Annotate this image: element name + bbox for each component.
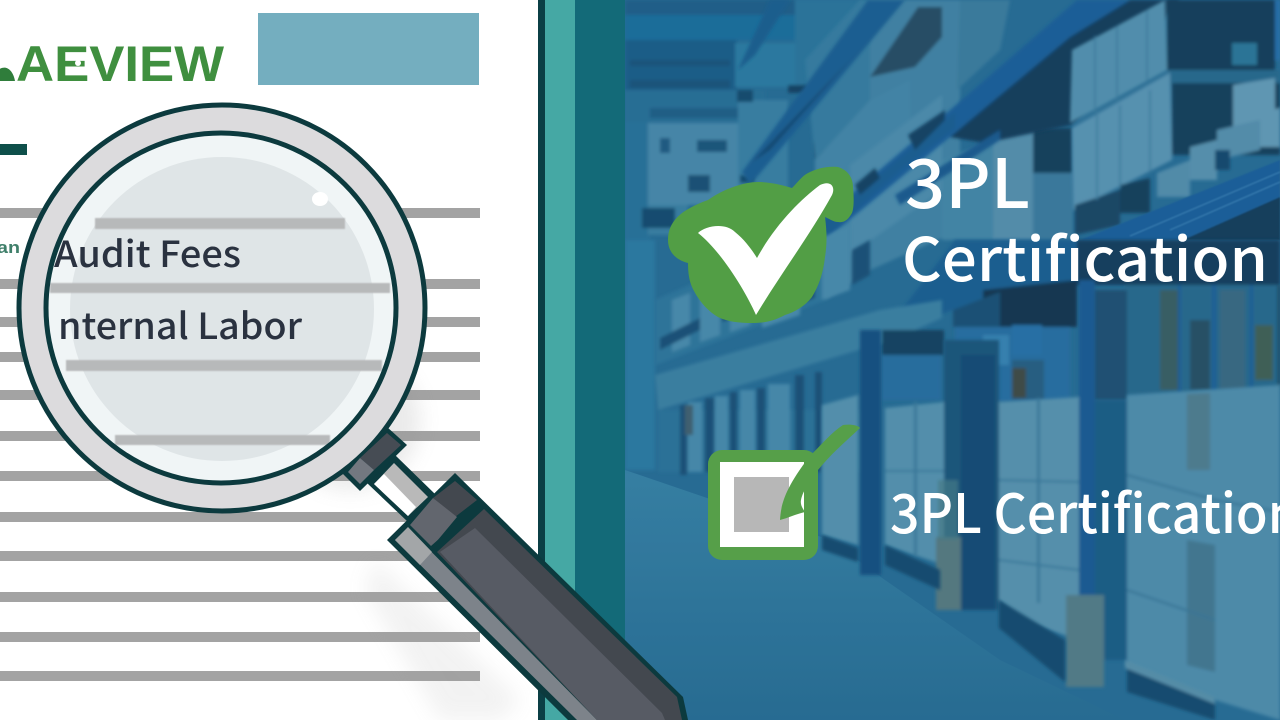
lens — [46, 133, 396, 483]
document header block — [258, 13, 479, 85]
label: 3PL Certification large: 3PL — [905, 129, 1030, 228]
warehouse floor — [625, 470, 935, 616]
boxes A — [822, 395, 858, 545]
label: 3PL Certification large — [902, 129, 1268, 299]
magnified text: Internal Labor: nternal Labor — [58, 298, 302, 350]
boxes C and D — [1127, 385, 1280, 720]
document text lines — [0, 208, 480, 681]
icon: green checkbox — [708, 425, 860, 560]
panel: review document — [0, 0, 538, 720]
lens magnified lines — [50, 218, 390, 445]
panel border and teal spine — [538, 0, 625, 720]
icon: magnifying glass — [19, 105, 688, 720]
lens frame — [19, 105, 425, 511]
warehouse middle shelf band — [882, 240, 1280, 402]
handle collar — [342, 427, 407, 491]
warehouse far end — [626, 0, 816, 469]
warehouse left rack — [655, 225, 944, 475]
lens shadow — [280, 350, 420, 490]
warehouse upper racks — [805, 0, 1073, 300]
icon: green check badge — [668, 167, 854, 323]
handle neck — [367, 455, 436, 522]
warehouse pallets — [822, 535, 1215, 720]
label: 3PL Certification large: Certification — [902, 212, 1268, 299]
lens highlight — [312, 192, 328, 206]
warehouse right stacks — [1070, 0, 1280, 235]
warehouse lower blue beam — [1080, 160, 1280, 240]
certification item 2 — [708, 425, 1280, 560]
panel: warehouse photo — [625, 0, 1280, 720]
stack seams — [1072, 75, 1164, 200]
barrels — [1066, 595, 1104, 687]
short heading rule — [0, 144, 27, 155]
document heading: REVIEW: AEVIEW — [16, 36, 225, 92]
handle grip — [387, 473, 688, 720]
warehouse lower posts and boxes — [822, 280, 1280, 720]
boxes B — [999, 397, 1079, 640]
magnified text: Audit Fees: Audit Fees — [54, 226, 241, 278]
warehouse colour wash — [824, 4, 1279, 701]
handle shadow — [365, 560, 520, 720]
certification item 1 — [668, 129, 1268, 323]
warehouse diagonal beams — [738, 0, 1180, 240]
